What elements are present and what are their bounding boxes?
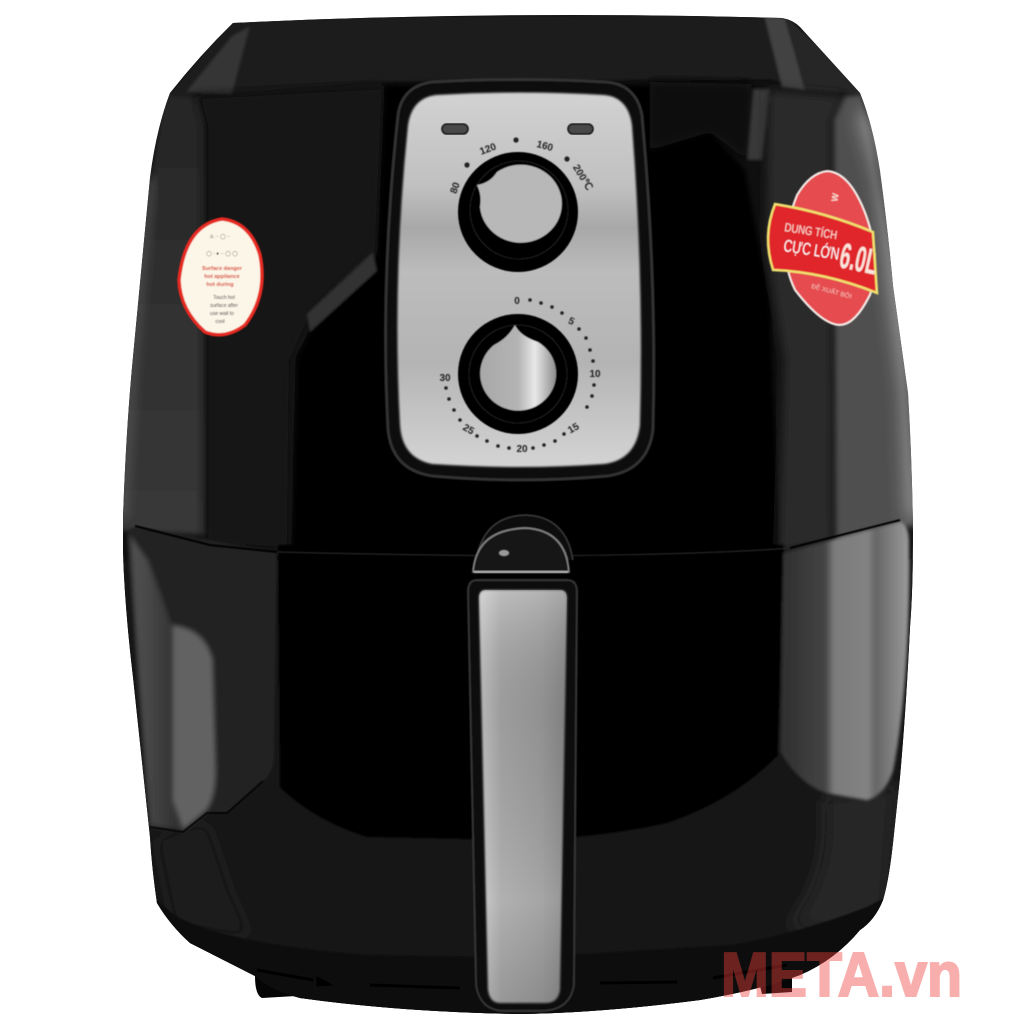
foot	[255, 976, 296, 998]
timer scale: 20	[516, 444, 528, 455]
indicator lights	[442, 124, 593, 134]
lower right corner lighter area	[793, 783, 898, 930]
left edge highlight	[123, 178, 150, 518]
left warning sticker	[179, 219, 262, 335]
left warning sticker: hot during	[206, 282, 234, 288]
timer scale: 5	[566, 316, 576, 328]
handle	[468, 515, 577, 1011]
upper right body	[766, 90, 845, 552]
left drawer window	[127, 527, 277, 832]
right capacity sticker: 6.0L	[836, 236, 881, 283]
right capacity sticker: ĐỀ XUẤT BỞI	[810, 280, 853, 301]
right capacity sticker: CỰC LỚN	[782, 236, 841, 264]
lower left corner lighter area	[150, 815, 260, 945]
timer scale: 25	[461, 422, 476, 438]
left warning sticker: cool	[215, 319, 225, 325]
right capacity sticker: DUNG TÍCH	[783, 220, 838, 243]
watermark: META.vn	[721, 941, 962, 1010]
drawer black centre	[278, 545, 784, 840]
right drawer window	[780, 522, 909, 800]
timer scale: 15	[566, 421, 582, 436]
timer scale	[439, 296, 601, 455]
timer scale: 10	[589, 369, 601, 380]
panel bezel	[386, 80, 654, 480]
control panel	[386, 80, 654, 480]
left warning sticker: ◯ · ● ·· ◯ ◯	[206, 251, 238, 257]
left warning sticker: Touch hot	[213, 295, 235, 301]
temperature scale: 200℃	[570, 163, 594, 192]
temperature knob	[458, 152, 578, 272]
handle dome	[473, 515, 573, 572]
base vents	[257, 965, 787, 988]
temperature scale: 80	[449, 181, 463, 195]
top lid	[170, 14, 803, 94]
timer knob	[458, 314, 578, 434]
right capacity sticker	[768, 171, 881, 325]
right edge highlight	[868, 110, 918, 520]
upper right lighter band	[834, 94, 915, 542]
left warning sticker: surface after	[210, 303, 238, 309]
drawer seam	[277, 548, 790, 556]
upper left band	[123, 92, 206, 537]
seam dark edges	[135, 520, 900, 552]
right capacity sticker: W	[829, 192, 841, 203]
body reflections	[110, 14, 920, 1020]
steel face	[397, 92, 641, 467]
upper right dark lid shadow	[650, 82, 752, 160]
left warning sticker: ⚠ ·· ◯ ··	[210, 234, 231, 240]
right foot	[758, 965, 792, 994]
temperature scale	[449, 137, 594, 195]
base	[156, 898, 884, 1014]
lid right corner	[788, 20, 860, 94]
handle steel strip	[479, 590, 567, 1003]
left warning sticker: Surface danger	[202, 266, 243, 272]
left warning sticker: hot appliance	[204, 274, 240, 280]
lid right light strip	[764, 15, 806, 90]
handle frame	[468, 580, 577, 1011]
product photo: air fryer	[123, 15, 960, 1014]
timer scale: 0	[514, 296, 520, 307]
left window outline	[150, 781, 263, 832]
left window inner reflection	[172, 625, 216, 830]
left window outer reflection	[130, 535, 185, 830]
lid left facet	[186, 26, 250, 94]
black area around panel	[292, 85, 780, 560]
left warning sticker: use wait to	[210, 311, 234, 317]
temperature scale: 160	[535, 139, 555, 154]
diagonal grey reflection	[307, 252, 377, 332]
upper right light strip	[747, 89, 770, 160]
lower body	[110, 560, 920, 1020]
timer scale: 30	[439, 373, 451, 384]
temperature scale: 120	[478, 141, 498, 158]
upper left secondary band	[197, 86, 385, 550]
